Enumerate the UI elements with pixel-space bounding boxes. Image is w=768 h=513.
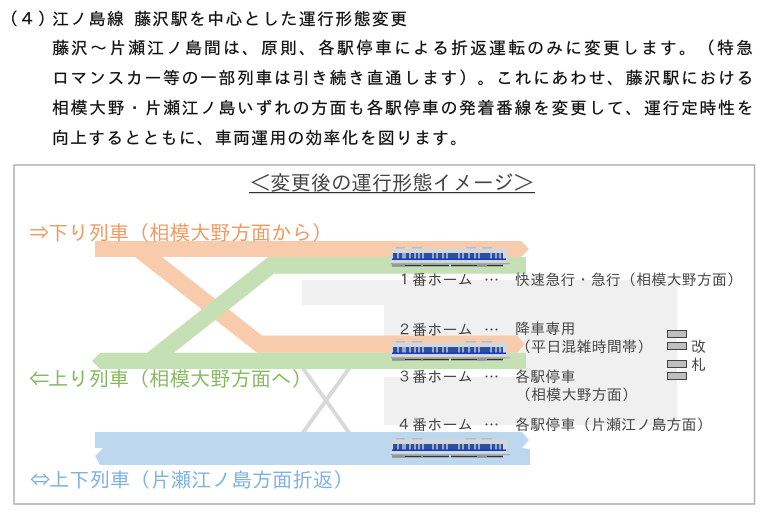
platform 3 label bbox=[397, 369, 637, 404]
platform 3 label: ⋯ bbox=[484, 369, 499, 384]
body text: 向上するとともに、車両運用の効率化を図ります。 bbox=[52, 129, 468, 148]
panel title: ＜変更後の運行形態イメージ＞ bbox=[250, 172, 534, 195]
platform 1 label: 快速急行・急行（相模大野方面） bbox=[515, 272, 742, 289]
platform 2 label: ⋯ bbox=[484, 322, 499, 337]
heading: 藤沢駅を中心とした運行形態変更 bbox=[134, 10, 408, 29]
legend: down trains: ⇒ bbox=[29, 223, 49, 243]
platform 3 label: （相模大野方面） bbox=[516, 387, 637, 404]
train on platform 1 bbox=[391, 247, 510, 266]
ticket gates bbox=[668, 330, 686, 380]
train on platform 2 bbox=[391, 341, 510, 360]
platform 2 label: ２番ホーム bbox=[397, 322, 473, 339]
ticket gate label: 改 bbox=[691, 339, 706, 356]
crossover: grey turnout bbox=[302, 367, 350, 434]
legend: up trains: 上り列車（相模大野方面へ） bbox=[48, 368, 312, 391]
legend: up and down shuttle: ⇔ bbox=[30, 470, 50, 490]
train on platform 4 bbox=[391, 438, 510, 456]
platform 3 label: ３番ホーム bbox=[397, 369, 473, 386]
track: up/down shuttle (blue) bbox=[95, 432, 530, 465]
station platform area bbox=[302, 280, 677, 425]
platform 4 label bbox=[397, 417, 712, 434]
platform 2 label: 降車専用 bbox=[515, 320, 576, 338]
body text bbox=[52, 39, 755, 148]
legend: up trains: ⇐ bbox=[29, 369, 49, 389]
body text: ロマンスカー等の一部列車は引き続き直通します）。これにあわせ、藤沢駅における bbox=[52, 69, 755, 88]
track: down trains (orange) bbox=[95, 241, 529, 353]
white strip behind platform 3 label bbox=[384, 369, 526, 377]
platform 2 label: （平日混雑時間帯） bbox=[516, 339, 652, 356]
panel: service diagram bbox=[14, 165, 754, 504]
platform 1 label: １番ホーム bbox=[397, 272, 473, 289]
track: up trains (green) bbox=[92, 257, 526, 369]
platform 1 label: ⋯ bbox=[484, 272, 499, 287]
heading: （４） bbox=[1, 10, 56, 29]
platform 2 label bbox=[397, 320, 652, 356]
body text: 藤沢～片瀬江ノ島間は、原則、各駅停車による折返運転のみに変更します。（特急 bbox=[52, 39, 755, 58]
heading bbox=[1, 10, 408, 29]
body text: 相模大野・片瀬江ノ島いずれの方面も各駅停車の発着番線を変更して、運行定時性を bbox=[52, 99, 755, 118]
platform 4 label: ４番ホーム bbox=[397, 417, 473, 434]
heading: 江ノ島線 bbox=[52, 10, 125, 29]
legend: down trains: 下り列車（相模大野方面から） bbox=[48, 222, 332, 245]
platform 4 label: 各駅停車（片瀬江ノ島方面） bbox=[515, 417, 712, 434]
legend: up and down shuttle: 上下列車（片瀬江ノ島方面折返） bbox=[49, 469, 353, 492]
platform 1 label bbox=[397, 272, 742, 289]
ticket gate label: 札 bbox=[691, 357, 706, 374]
ticket gate label bbox=[691, 339, 706, 374]
platform 3 label: 各駅停車 bbox=[515, 369, 576, 386]
platform 4 label: ⋯ bbox=[484, 417, 499, 432]
